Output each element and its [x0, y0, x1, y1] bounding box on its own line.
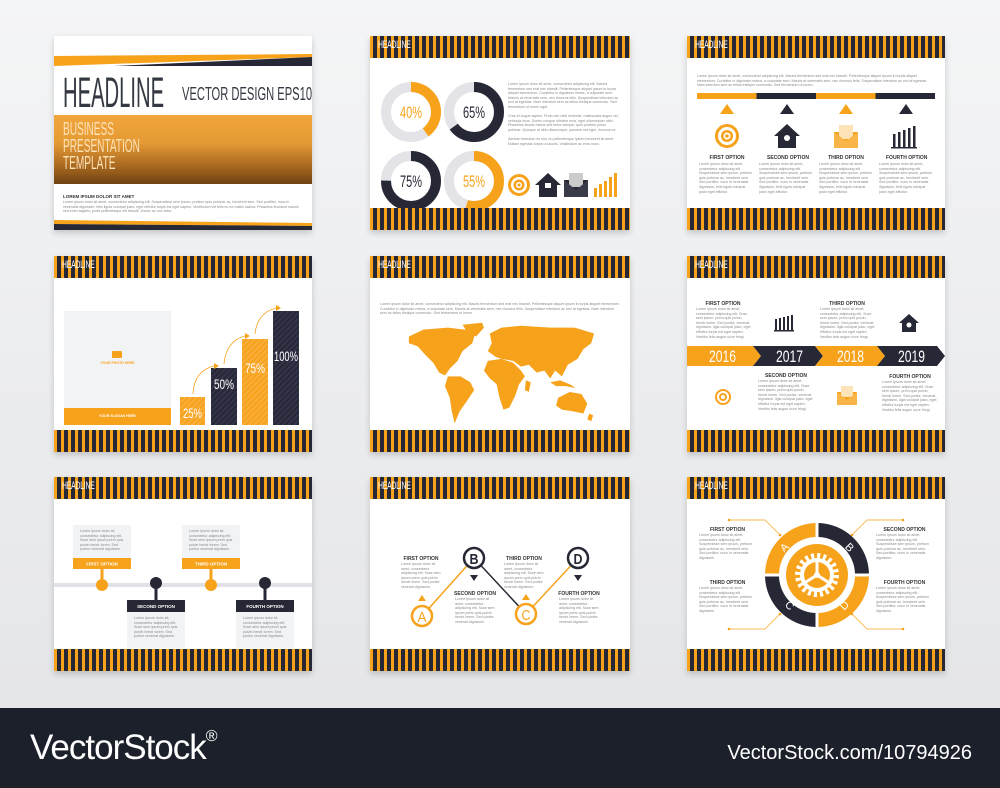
timeline graphic: SECOND OPTION	[137, 604, 175, 609]
option icons	[715, 104, 917, 148]
photo band	[54, 115, 312, 184]
slide 3: four options: Lorem ipsum dolor sit amet, consectetur adipiscing elit. Suspendisse sem ipsum, pretium quis pulvinar ac, hendrerit sem. Sed porttitor, nunc in venenatis dignissim, felis ligula volutpat justo eget efficitur.	[879, 162, 932, 194]
slide 9: gear circle	[687, 477, 945, 671]
slide 9: gear circle: Lorem ipsum dolor sit amet, consectetur adipiscing elit. Suspendisse sem ipsum, pretium quis pulvinar ac, hendrerit sem. Sed porttitor, nunc in venenatis dignissim.	[876, 586, 929, 613]
slide 4: bar chart: HEADLINE	[62, 259, 95, 271]
text column: Aenean interdum ex nisi, eu pellentesque ipsum hendrerit sit amet. Nullam egestas turpis ut iaculis. Vestibulum ac eros nunc.	[508, 137, 614, 146]
slide 6: timeline years: Lorem ipsum dolor sit amet, consectetur adipiscing elit. Suse sem ipsum, prem quis pulvin, hendr lorem. Sed portior, venenat dignissim. ligla volutpat justo, eget efficitur turpis est eget sapien. Vestibu felis augue ucce fringi.	[882, 380, 937, 412]
slide 6: timeline years: FOURTH OPTION	[889, 374, 931, 380]
slide 3: four options: Lorem ipsum dolor sit amet, consectetur adipiscing elit. Suspendisse sem ipsum, pretium quis pulvinar ac, hendrerit sem. Sed porttitor, nunc in venenatis dignissim, felis ligula volutpat justo eget efficitur.	[699, 162, 752, 194]
slide 8: ABCD zigzag: Lorem ipsum dolor sit amet, consectetur adipiscing elit. Suse sem ipsum prem quis pulvin hendr lorem. Sed portior venenat dignissim.	[455, 597, 495, 624]
timeline graphic: FIRST OPTION	[86, 562, 118, 566]
growth bars: 25%	[183, 405, 202, 421]
photo placeholder	[64, 311, 171, 408]
slide 7: pin timeline: Lorem ipsum dolor sit, consectetur adipiscing elit. Suse sem ipsum prem quis pulvin hendr lorem. Sed portior venenat dignissim.	[189, 529, 232, 551]
slide 1: cover	[54, 36, 312, 230]
zigzag graphic: B	[470, 551, 479, 568]
slide 7: pin timeline: Lorem ipsum dolor sit, consectetur adipiscing elit. Suse sem ipsum prem quis pulvin hendr lorem. Sed portior venenat dignissim.	[134, 616, 177, 638]
option texts: FIRST OPTION	[710, 527, 745, 533]
cover title: PRESENTATION	[63, 136, 140, 156]
slide 6: timeline years: Lorem ipsum dolor sit amet, consectetur adipiscing elit. Suse sem ipsum, prem quis pulvin, hendr lorem. Sed portior, venenat dignissim. ligla volutpat justo, eget efficitur turpis est eget sapien. Vestibu felis augue ucce fringi.	[758, 379, 813, 411]
icons	[715, 314, 919, 405]
slogan bar	[64, 408, 171, 425]
slide 7: pin timeline: Lorem ipsum dolor sit, consectetur adipiscing elit. Suse sem ipsum prem quis pulvin hendr lorem. Sed portior venenat dignissim.	[243, 616, 286, 638]
slide 3: four options: THIRD OPTION	[828, 155, 864, 161]
donut charts: 65%	[463, 103, 485, 122]
circle diagram: C	[782, 599, 796, 613]
slogan bar: YOUR SLOGAN HERE	[99, 414, 136, 418]
subtitle: VECTOR DESIGN EPS10	[182, 84, 312, 104]
footer bar	[0, 708, 1000, 788]
timeline graphic: FOURTH OPTION	[246, 604, 284, 609]
timeline graphic	[54, 525, 312, 648]
year arrows: 2018	[837, 347, 864, 366]
slide 9: gear circle: HEADLINE	[695, 480, 728, 492]
year arrows: 2017	[776, 347, 803, 366]
lorem heading: LOREM IPSUM DOLOR SIT AMET	[63, 194, 134, 199]
footer id: VectorStock.com/10794926	[727, 742, 972, 764]
text column: Cras et augue sapien. Proin nec nibh molestie, malesuada augue vel, vehicula risus. Donec congue ultricies eros, eget ullamcorper nibh. Phasellus iaculis metus sed tortor semper, quis porttitor purus pulvinar. Quisque at nibh ullamcorper, posuere est eget, rhoncus ex.	[508, 114, 619, 132]
slide 3: four options: FOURTH OPTION	[886, 155, 927, 161]
slide 8: ABCD zigzag: FOURTH OPTION	[558, 591, 600, 597]
upper option texts: FIRST OPTION	[706, 301, 740, 307]
slide 8: ABCD zigzag	[370, 477, 630, 671]
year arrows: 2019	[898, 347, 925, 366]
slide 6: timeline years	[687, 256, 945, 452]
world map	[408, 322, 594, 424]
slide 3: four options: Lorem ipsum dolor sit amet, consectetur adipiscing elit. Suspendisse sem ipsum, pretium quis pulvinar ac, hendrerit sem. Sed porttitor, nunc in venenatis dignissim, felis ligula volutpat justo eget efficitur.	[759, 162, 812, 194]
circle diagram: D	[838, 599, 852, 613]
donut charts	[381, 82, 504, 208]
card texts: Lorem ipsum dolor sit, consectetur adipiscing elit. Suse sem ipsum prem quis pulvin hendr lorem. Sed portior venenat dignissim.	[80, 529, 123, 551]
lorem body: Lorem ipsum dolor sit amet, consectetur adipiscing elit. Suspendisse sem ipsum, pretium quis pulvinar ac, hendrerit sem. Sed porttitor, nunc in venenatis dignissim, felis ligula volutpat justo, eget efficitur turpis est eget sapien. Vestibulum vel felis eu ex mattis lacinia. Phasellus tincidunt mauris sed enim sagittis, porta pellentesque elit blandit. Donec ac orci dolor.	[63, 200, 299, 213]
circle diagram	[728, 518, 904, 630]
slide 8: ABCD zigzag: HEADLINE	[378, 480, 411, 492]
slide 2: donuts: HEADLINE	[378, 39, 411, 51]
donut charts: 75%	[400, 172, 422, 191]
timeline graphic: THIRD OPTION	[195, 562, 227, 566]
zigzag graphic: C	[522, 607, 531, 624]
bottom accent bars	[54, 220, 312, 230]
slide 9: gear circle: SECOND OPTION	[884, 527, 925, 533]
circle diagram: A	[778, 541, 792, 555]
zigzag graphic	[410, 546, 590, 628]
cover title: BUSINESS	[63, 119, 114, 139]
growth bars	[180, 305, 299, 425]
text column	[508, 82, 619, 146]
slide 3: four options: SECOND OPTION	[767, 155, 809, 161]
slide 8: ABCD zigzag: SECOND OPTION	[454, 591, 496, 597]
segmented bar	[697, 93, 935, 99]
photo placeholder: YOUR PHOTO HERE	[100, 361, 135, 365]
slide 5: world map: HEADLINE	[378, 259, 411, 271]
slide 6: timeline years: Lorem ipsum dolor sit amet, consectetur adipiscing elit. Suse sem ipsum, prem quis pulvin, hendr lorem. Sed portior, venenat dignissim. ligla volutpat justo, eget efficitur turpis est eget sapien. Vestibu felis augue ucce fringi.	[820, 307, 875, 339]
zigzag graphic: A	[418, 609, 426, 626]
slide 9: gear circle: THIRD OPTION	[710, 580, 745, 586]
slide 6: timeline years: THIRD OPTION	[829, 301, 865, 307]
growth bars: 50%	[214, 376, 234, 392]
growth bars: 100%	[274, 348, 298, 364]
cover title: TEMPLATE	[63, 153, 115, 173]
intro text: Lorem ipsum dolor sit amet, consectetur adipiscing elit. Mauris fermentum sed erat nec blandit. Pellentesque aliquet ipsum in turpis aliquet elementum. Curabitur in dignissim metus, a vulputate sem. Mauris at venenatis sem, nec rhoncus felis. Suspendisse interdum ac orci at egestas. Nam interdum sem ac tellus tristique commodo. Sed fermentum ut lorem.	[697, 74, 927, 87]
slide 7: pin timeline	[54, 477, 312, 671]
intro text: Lorem ipsum dolor sit amet, consectetur adipiscing elit. Mauris fermentum sed erat nec blandit. Pellentesque aliquet ipsum in turpis aliquet elementum. Curabitur in dignissim metus, a vulputate sem. Mauris at venenatis sem, nec rhoncus felis. Suspendisse interdum ac orci at egestas. Nam interdum sem ac tellus tristique commodo. Sed fermentum ut lorem.	[380, 302, 620, 315]
circle diagram: B	[842, 541, 856, 555]
donut charts: 40%	[400, 103, 422, 122]
slide 3: four options	[687, 36, 945, 230]
slide 3: four options: HEADLINE	[695, 39, 728, 51]
slide 8: ABCD zigzag: Lorem ipsum dolor sit amet, consectetur adipiscing elit. Suse sem ipsum prem quis pulvin hendr lorem. Sed portior venenat dignissim.	[504, 562, 544, 589]
slide 5: world map	[370, 256, 630, 452]
cover title	[63, 119, 140, 173]
slide 9: gear circle: Lorem ipsum dolor sit amet, consectetur adipiscing elit. Suspendisse sem ipsum, pretium quis pulvinar ac, hendrerit sem. Sed porttitor, nunc in venenatis dignissim.	[876, 533, 929, 560]
zigzag graphic: D	[574, 551, 583, 568]
icons row	[508, 173, 617, 197]
headline: HEADLINE	[63, 69, 164, 117]
slide 8: ABCD zigzag: Lorem ipsum dolor sit amet, consectetur adipiscing elit. Suse sem ipsum prem quis pulvin hendr lorem. Sed portior venenat dignissim.	[401, 562, 441, 589]
option texts: FIRST OPTION	[404, 556, 438, 562]
year arrows: 2016	[709, 347, 736, 366]
option labels and texts: FIRST OPTION	[710, 155, 744, 161]
donut charts: 55%	[463, 172, 485, 191]
slide 8: ABCD zigzag: THIRD OPTION	[506, 556, 542, 562]
slide 2: donuts	[370, 36, 630, 230]
growth bars: 75%	[245, 360, 265, 376]
slide 3: four options: Lorem ipsum dolor sit amet, consectetur adipiscing elit. Suspendisse sem ipsum, pretium quis pulvinar ac, hendrerit sem. Sed porttitor, nunc in venenatis dignissim, felis ligula volutpat justo eget efficitur.	[819, 162, 872, 194]
slide 6: timeline years: Lorem ipsum dolor sit amet, consectetur adipiscing elit. Suse sem ipsum, prem quis pulvin, hendr lorem. Sed portior, venenat dignissim. ligla volutpat justo, eget efficitur turpis est eget sapien. Vestibu felis augue ucce fringi.	[696, 307, 751, 339]
text column: Lorem ipsum dolor sit amet, consectetur adipiscing elit. Mauris fermentum sed erat nec blandit. Pellentesque aliquet ipsum in turpis aliquet elementum. Curabitur in dignissim metus, a vulputate sem. Mauris at venenatis sem, nec rhoncus felis. Suspendisse interdum ac orci at egestas. Nam interdum sem ac tellus tristique commodo. Sed fermentum ut lorem eget.	[508, 82, 618, 109]
slide 6: timeline years: HEADLINE	[695, 259, 728, 271]
footer brand: VectorStock®	[30, 728, 217, 767]
slide 4: bar chart	[54, 256, 312, 452]
lower option texts: SECOND OPTION	[765, 373, 807, 379]
slide 8: ABCD zigzag: Lorem ipsum dolor sit amet, consectetur adipiscing elit. Suse sem ipsum prem quis pulvin hendr lorem. Sed portior venenat dignissim.	[559, 597, 599, 624]
slide 9: gear circle: Lorem ipsum dolor sit amet, consectetur adipiscing elit. Suspendisse sem ipsum, pretium quis pulvinar ac, hendrerit sem. Sed porttitor, nunc in venenatis dignissim.	[699, 533, 752, 560]
slide 7: pin timeline: HEADLINE	[62, 480, 95, 492]
slide 9: gear circle: FOURTH OPTION	[884, 580, 925, 586]
year arrows	[687, 346, 945, 366]
slide 9: gear circle: Lorem ipsum dolor sit amet, consectetur adipiscing elit. Suspendisse sem ipsum, pretium quis pulvinar ac, hendrerit sem. Sed porttitor, nunc in venenatis dignissim.	[699, 586, 752, 613]
top accent bars	[54, 54, 312, 66]
